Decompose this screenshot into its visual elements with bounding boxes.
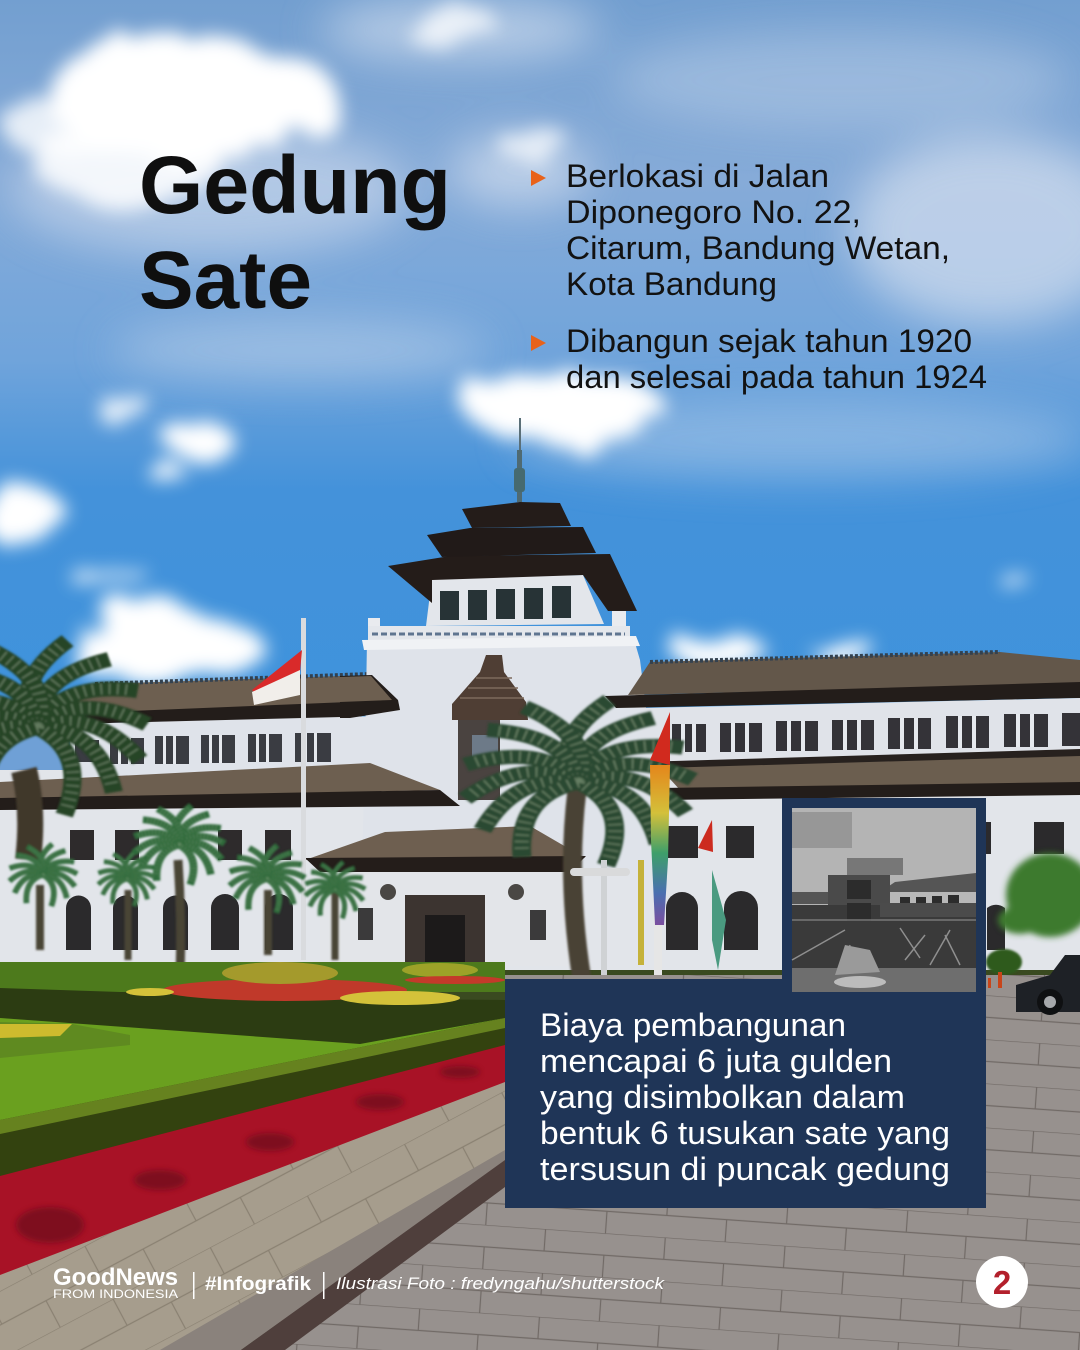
- wall base: [0, 770, 1080, 970]
- title: Gedung: [139, 140, 451, 231]
- walkway left: [0, 1080, 505, 1350]
- panel text: [540, 1007, 950, 1187]
- porch: [320, 868, 572, 966]
- panel text: mencapai 6 juta gulden: [540, 1043, 892, 1079]
- logo: GoodNews from Indonesia: GoodNews: [53, 1264, 178, 1291]
- red flower bed: [0, 1045, 505, 1275]
- bullet: location: Berlokasi di Jalan: [566, 158, 829, 194]
- footer: [53, 1264, 666, 1301]
- panel text: bentuk 6 tusukan sate yang: [540, 1115, 950, 1151]
- bullet: location: Diponegoro No. 22,: [566, 194, 861, 230]
- page number badge: [976, 1256, 1028, 1308]
- garden: [0, 962, 1002, 1275]
- bullet marker: [531, 335, 546, 351]
- hashtag: #Infografik: [205, 1274, 311, 1295]
- inset historic photo: [782, 798, 986, 992]
- bullet: construction years: [531, 323, 987, 395]
- bullet: location: Citarum, Bandung Wetan,: [566, 230, 950, 266]
- left eave tip over block: [340, 675, 400, 718]
- panel text: tersusun di puncak gedung: [540, 1151, 950, 1187]
- flag: Indonesia: [252, 618, 306, 960]
- panel text: Biaya pembangunan: [540, 1007, 846, 1043]
- left second roof: [0, 763, 440, 800]
- paving right: [270, 975, 1080, 1350]
- central block: [362, 636, 660, 870]
- rainbow flags: [570, 712, 726, 978]
- left wing: [60, 675, 400, 715]
- ground base: [0, 955, 1080, 1350]
- logo: GoodNews from Indonesia: FROM INDONESIA: [53, 1287, 178, 1301]
- title: Sate: [139, 235, 312, 326]
- bullet: construction years: dan selesai pada tahun 1924: [566, 359, 987, 395]
- building: [0, 418, 1080, 970]
- gable: [452, 655, 528, 720]
- page number badge: 2: [993, 1264, 1011, 1301]
- bullet: location: Kota Bandung: [566, 266, 777, 302]
- panel: construction cost: [505, 979, 986, 1208]
- photo credit: Ilustrasi Foto : fredyngahu/shutterstock: [336, 1274, 666, 1293]
- panel text: yang disimbolkan dalam: [540, 1079, 905, 1115]
- clouds: [0, 0, 1080, 680]
- bullet: location: [531, 158, 950, 302]
- tower: [426, 575, 604, 626]
- bullet marker: [531, 170, 546, 186]
- title: [139, 140, 451, 326]
- curb: [160, 1150, 505, 1350]
- sky: [0, 0, 1080, 720]
- bullet: construction years: Dibangun sejak tahun 1920: [566, 323, 972, 359]
- parked car: [1016, 955, 1080, 1015]
- palm trees: [0, 637, 1080, 980]
- right wing: [628, 652, 1080, 695]
